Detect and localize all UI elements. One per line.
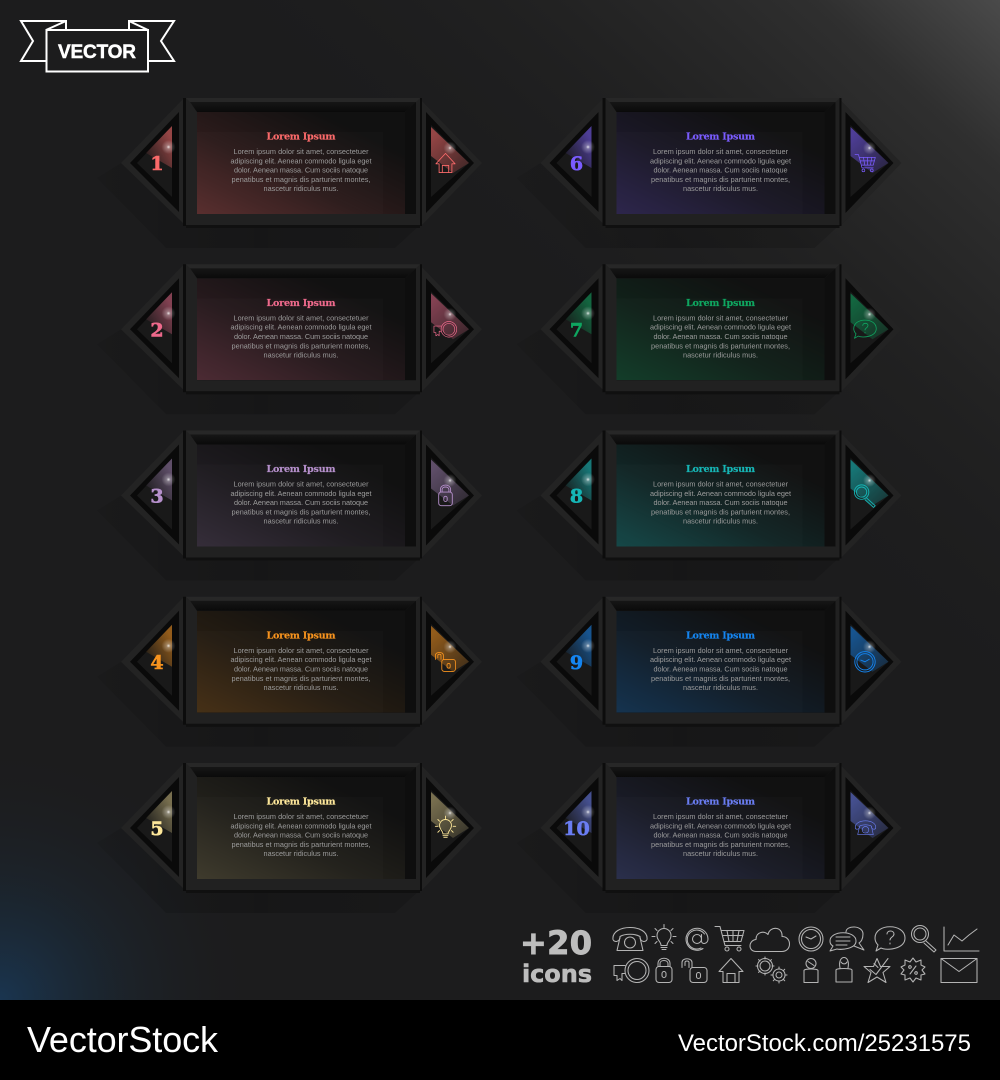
panel: card 7 [516, 264, 902, 414]
text block 2: adipiscing elit. Aenean commodo ligula eget [230, 323, 372, 332]
text block 4: adipiscing elit. Aenean commodo ligula eget [230, 655, 372, 664]
text block 1: adipiscing elit. Aenean commodo ligula eget [230, 156, 372, 165]
footer url: VectorStock.com/25231575 [678, 1030, 971, 1057]
icon: key [614, 958, 649, 982]
icon: telephone [613, 928, 647, 950]
text block 9: Lorem ipsum dolor sit amet, consectetuer [653, 646, 789, 655]
badge: vector ribbon [21, 21, 174, 72]
number tag 9 [540, 597, 606, 725]
text panel 4 [197, 611, 405, 713]
text block 3: Lorem ipsum dolor sit amet, consectetuer [234, 480, 369, 488]
label: +20 icons: icons [522, 960, 592, 988]
text block 8: adipiscing elit. Aenean commodo ligula eget [650, 489, 791, 498]
number tag 10 [540, 763, 606, 891]
text block 1: Lorem ipsum dolor sit amet, consectetuer [234, 147, 369, 156]
icon tag 6 [840, 98, 902, 226]
heading 9: Lorem Ipsum [686, 630, 755, 641]
text block 7: dolor. Aenean massa. Cum sociis natoque [654, 332, 788, 341]
panel: card 5 [97, 763, 482, 913]
heading 2: Lorem Ipsum [266, 298, 336, 309]
text block 9: nascetur ridiculus mus. [683, 683, 758, 692]
text block 7: penatibus et magnis dis parturient montes, [651, 341, 790, 350]
footer logo: VectorStock [27, 1019, 219, 1060]
panel: card 8 [516, 430, 902, 580]
text block 7 [650, 313, 791, 360]
text block 5: dolor. Aenean massa. Cum sociis natoque [234, 831, 368, 840]
panel: card 6 [516, 98, 902, 248]
heading 10: Lorem Ipsum [686, 796, 755, 808]
text block 6: penatibus et magnis dis parturient montes, [651, 175, 790, 184]
icon: clock [799, 927, 823, 951]
text block 6: nascetur ridiculus mus. [683, 184, 758, 193]
icon: search [912, 926, 936, 952]
panel: card 9 [516, 597, 902, 747]
text block 8: penatibus et magnis dis parturient montes, [651, 508, 790, 516]
text block 6 [650, 147, 791, 193]
number tag 6 [540, 98, 606, 226]
icon: lock [656, 958, 672, 982]
text block 6: Lorem ipsum dolor sit amet, consectetuer [653, 147, 789, 156]
icon tag 1 [420, 98, 482, 226]
number tag 1 [121, 98, 186, 226]
text block 1: penatibus et magnis dis parturient montes, [232, 175, 370, 184]
number tag 3 [121, 430, 186, 558]
icon: question [875, 927, 905, 951]
number 9: 9 [570, 652, 583, 674]
icon: woman [836, 958, 852, 982]
icon: shopping cart [855, 155, 875, 172]
heading 8: Lorem Ipsum [686, 464, 755, 475]
icon tag 3 [420, 430, 482, 558]
icon tag 10 [840, 763, 902, 891]
icon tag 4 [420, 597, 482, 725]
icon: user [804, 958, 818, 982]
text block 3 [230, 480, 372, 526]
icon tag 5 [420, 763, 482, 891]
icon: light bulb [435, 816, 456, 837]
text block 4: dolor. Aenean massa. Cum sociis natoque [234, 664, 368, 673]
text block 8 [650, 480, 791, 526]
text block 8: nascetur ridiculus mus. [683, 517, 758, 526]
number 8: 8 [570, 486, 583, 508]
number 5: 5 [150, 818, 164, 840]
text block 3: dolor. Aenean massa. Cum sociis natoque [234, 498, 368, 507]
text block 8: dolor. Aenean massa. Cum sociis natoque [654, 498, 788, 507]
number 6: 6 [570, 153, 583, 175]
number 3: 3 [150, 486, 164, 508]
number 10: 10 [563, 818, 590, 840]
text block 5: Lorem ipsum dolor sit amet, consectetuer [234, 812, 369, 821]
number tag 8 [540, 430, 606, 558]
icon: star [864, 958, 890, 982]
icon: open lock [682, 959, 707, 982]
text panel 3 [197, 444, 405, 546]
text block 10: Lorem ipsum dolor sit amet, consectetuer [653, 812, 789, 821]
icon: clock [855, 652, 875, 672]
icon: bulb [652, 924, 676, 950]
icon: discount badge [901, 958, 925, 982]
text block 1: nascetur ridiculus mus. [264, 184, 338, 193]
text panel 9 [616, 611, 824, 713]
text panel 6 [616, 112, 824, 214]
text block 5: adipiscing elit. Aenean commodo ligula eget [230, 821, 372, 830]
text block 3: adipiscing elit. Aenean commodo ligula eget [230, 489, 372, 498]
text block 2: dolor. Aenean massa. Cum sociis natoque [234, 332, 368, 341]
text panel 1 [197, 112, 405, 214]
label: +20 icons [520, 924, 592, 988]
icon: cart [715, 926, 744, 951]
text block 6: dolor. Aenean massa. Cum sociis natoque [654, 166, 788, 175]
text block 6: adipiscing elit. Aenean commodo ligula eget [650, 156, 791, 165]
text block 2: Lorem ipsum dolor sit amet, consectetuer [234, 313, 369, 322]
icon: magnifier [854, 485, 875, 507]
panel: card 10 [516, 763, 902, 913]
text block 7: adipiscing elit. Aenean commodo ligula eget [650, 323, 791, 332]
label: +20 icons: +20 [520, 924, 592, 962]
icon: at sign [686, 928, 708, 950]
text block 3: nascetur ridiculus mus. [264, 517, 338, 526]
icon: chart [944, 927, 979, 951]
text panel 10 [616, 777, 824, 879]
panel: card 2 [97, 264, 482, 414]
icon set: twenty outline icons [613, 924, 979, 983]
text block 3: penatibus et magnis dis parturient montes, [232, 508, 370, 516]
panel: card 4 [97, 597, 482, 747]
text panel 2 [197, 278, 405, 380]
heading 4: Lorem Ipsum [266, 630, 336, 641]
icon: key [434, 322, 457, 337]
text block 4: penatibus et magnis dis parturient montes, [232, 674, 370, 683]
icon: house [436, 153, 455, 173]
text block 2: nascetur ridiculus mus. [264, 350, 338, 360]
text block 8: Lorem ipsum dolor sit amet, consectetuer [653, 480, 789, 488]
text block 7: nascetur ridiculus mus. [683, 350, 758, 360]
text block 5: nascetur ridiculus mus. [264, 849, 338, 858]
icon: telephone [855, 821, 876, 835]
panel: card 1 [97, 98, 482, 248]
heading 5: Lorem Ipsum [266, 796, 336, 808]
footer bar [0, 1000, 1000, 1080]
heading 6: Lorem Ipsum [686, 132, 755, 142]
text block 9 [650, 646, 791, 692]
text block 5: penatibus et magnis dis parturient montes, [232, 840, 370, 849]
text block 5 [230, 812, 372, 858]
number 1: 1 [150, 153, 164, 175]
text block 10: adipiscing elit. Aenean commodo ligula eget [650, 821, 791, 830]
heading 1: Lorem Ipsum [266, 132, 336, 142]
icon tag 8 [840, 430, 902, 558]
text panel 8 [616, 444, 824, 546]
icon tag 7 [840, 264, 902, 392]
text block 7: Lorem ipsum dolor sit amet, consectetuer [653, 313, 789, 322]
number tag 7 [540, 264, 606, 392]
heading 7: Lorem Ipsum [686, 298, 755, 309]
icon: open lock [435, 652, 455, 671]
text block 10: dolor. Aenean massa. Cum sociis natoque [654, 831, 788, 840]
number 7: 7 [570, 319, 583, 341]
text block 10 [650, 812, 791, 858]
text panel 5 [197, 777, 405, 879]
icon: chat [830, 927, 864, 951]
text block 4: nascetur ridiculus mus. [264, 683, 338, 692]
badge: vector ribbon: VECTOR [58, 42, 136, 63]
icon: envelope [941, 958, 977, 982]
icon: gears [756, 957, 787, 983]
text block 2: penatibus et magnis dis parturient montes, [232, 341, 370, 350]
number 4: 4 [150, 652, 164, 674]
text panel 7 [616, 278, 824, 380]
text block 9: dolor. Aenean massa. Cum sociis natoque [654, 664, 788, 673]
heading 3: Lorem Ipsum [266, 464, 336, 475]
icon: lock [439, 485, 452, 506]
icon: cloud [750, 928, 790, 952]
icon: home [719, 958, 743, 982]
text block 10: nascetur ridiculus mus. [683, 849, 758, 858]
number tag 4 [121, 597, 186, 725]
number tag 5 [121, 763, 186, 891]
icon tag 9 [840, 597, 902, 725]
icon tag 2 [420, 264, 482, 392]
text block 9: penatibus et magnis dis parturient montes, [651, 674, 790, 683]
icon: question bubble [854, 320, 876, 338]
text block 1: dolor. Aenean massa. Cum sociis natoque [234, 166, 368, 175]
text block 4 [230, 646, 372, 692]
text block 4: Lorem ipsum dolor sit amet, consectetuer [234, 646, 369, 655]
number 2: 2 [150, 319, 164, 341]
panel: card 3 [97, 430, 482, 580]
text block 9: adipiscing elit. Aenean commodo ligula eget [650, 655, 791, 664]
text block 2 [230, 313, 372, 360]
text block 1 [230, 147, 372, 193]
number tag 2 [121, 264, 186, 392]
text block 10: penatibus et magnis dis parturient montes, [651, 840, 790, 849]
